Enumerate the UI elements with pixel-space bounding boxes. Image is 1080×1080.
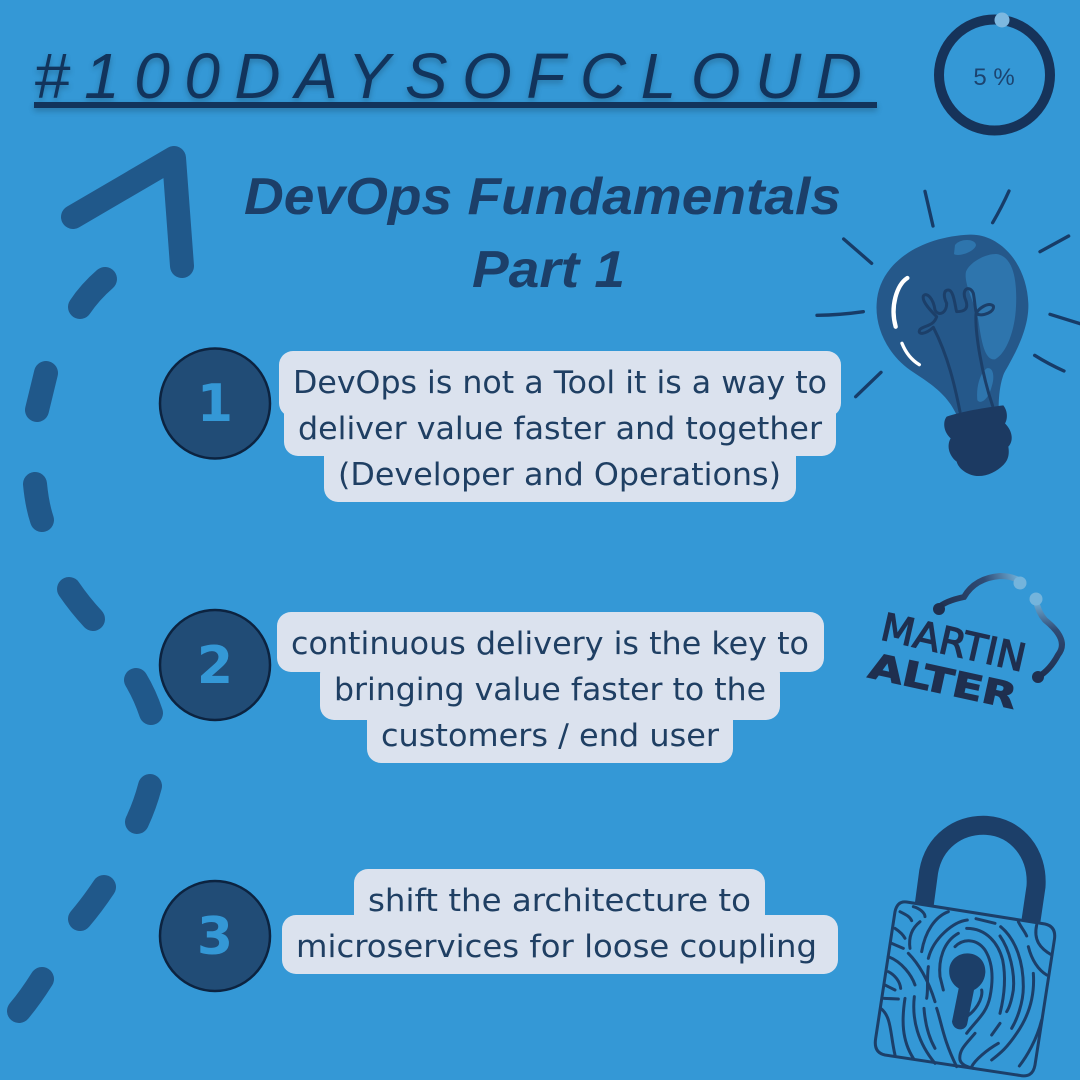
logo cloud outline	[933, 576, 1062, 683]
text callout 3: shift the architecture to	[368, 883, 751, 919]
text callout 3	[282, 869, 838, 974]
text callout 3: microservices for loose coupling	[296, 929, 817, 965]
heading: DevOps Fundamentals Part 1: Part 1	[472, 241, 625, 299]
title: #100DAYSOFCLOUD	[34, 40, 862, 112]
progress ring: 5 %	[939, 12, 1050, 130]
number badge 3: 3	[197, 907, 233, 967]
icon: fingerprint padlock	[875, 825, 1055, 1076]
text callout 1: DevOps is not a Tool it is a way to	[293, 365, 827, 401]
text callout 1	[279, 351, 841, 502]
number badge 3	[160, 881, 270, 991]
step 3	[160, 869, 838, 991]
heading: DevOps Fundamentals Part 1: DevOps Fundamentals	[244, 168, 841, 226]
text callout 1: deliver value faster and together	[298, 411, 822, 447]
number badge 2: 2	[197, 636, 233, 696]
icon: light bulb	[817, 191, 1080, 476]
step 2	[160, 610, 824, 763]
logo: Martin Alter	[865, 576, 1062, 718]
text callout 2: continuous delivery is the key to	[291, 626, 809, 662]
progress ring: 5 %: 5 %	[973, 64, 1015, 91]
logo: Martin Alter: ALTER	[865, 647, 1020, 718]
text callout 2	[277, 612, 824, 763]
number badge 1	[160, 348, 270, 458]
text callout 2: customers / end user	[381, 718, 719, 754]
number badge 1: 1	[197, 374, 233, 434]
step 1	[160, 348, 841, 502]
text callout 1: (Developer and Operations)	[338, 457, 781, 493]
logo: Martin Alter: MARTIN	[877, 605, 1030, 680]
number badge 2	[160, 610, 270, 720]
arrow: dashed upward path	[19, 158, 182, 1011]
heading: DevOps Fundamentals Part 1	[244, 168, 841, 299]
text callout 2: bringing value faster to the	[334, 672, 766, 708]
